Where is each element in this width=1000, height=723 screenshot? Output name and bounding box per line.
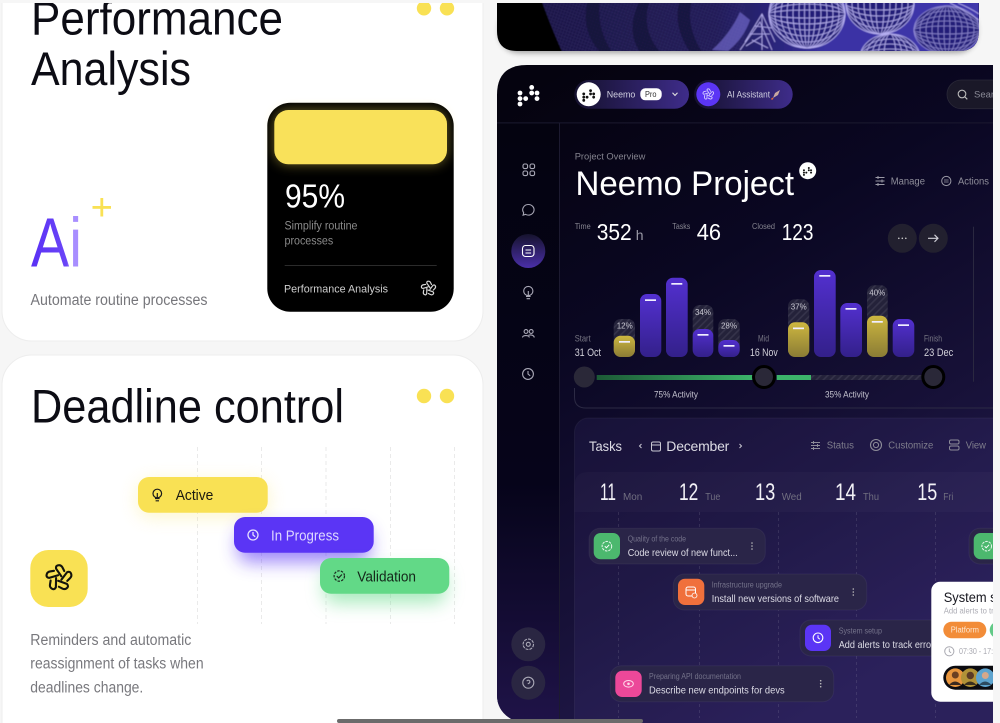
text: reminders bbox=[30, 632, 204, 697]
panel: dashboard bbox=[497, 65, 1000, 723]
date labels bbox=[575, 335, 953, 356]
tag: Active bbox=[138, 477, 268, 517]
stats row bbox=[574, 223, 813, 240]
bar chart bbox=[614, 270, 914, 357]
icon: chat bbox=[523, 204, 534, 215]
day header row: 12 bbox=[679, 479, 698, 506]
task: code review: Code review of new funct... bbox=[628, 547, 738, 559]
timeline slider: 75% Activity bbox=[654, 390, 698, 400]
purple bars bbox=[640, 270, 914, 357]
day header row: 13 bbox=[755, 479, 775, 506]
heading: Performance Analysis: Analysis bbox=[31, 42, 191, 95]
task: install: Install new versions of software bbox=[712, 593, 839, 605]
stats row: Tasks bbox=[672, 222, 690, 231]
stat card: 95%: Simplify routine bbox=[284, 220, 358, 232]
actions: manage: Manage bbox=[891, 176, 925, 187]
tag: Validation: Validation bbox=[357, 568, 416, 585]
tasks header: December bbox=[666, 438, 730, 454]
task: alerts: Add alerts to track errors bbox=[839, 639, 939, 651]
percent labels: 28% bbox=[721, 322, 737, 331]
panel: performance analysis card bbox=[2, 0, 483, 341]
day header row: Fri bbox=[943, 492, 953, 503]
timeline slider: 35% Activity bbox=[825, 390, 869, 400]
tasks header: Customize bbox=[888, 440, 934, 452]
panel: tasks bbox=[574, 418, 1000, 723]
percent labels: 34% bbox=[695, 308, 711, 317]
ticks bbox=[619, 275, 909, 347]
stats row: Time bbox=[575, 222, 591, 231]
tasks header: Status bbox=[827, 440, 854, 452]
chip: AI Assistant: AI Assistant bbox=[727, 89, 770, 100]
timeline slider bbox=[574, 366, 993, 408]
stat card: 95%: processes bbox=[284, 236, 333, 248]
actions: manage bbox=[876, 176, 989, 187]
sidebar icons bbox=[511, 164, 545, 700]
logo bbox=[518, 85, 539, 106]
icon: bulb bbox=[524, 286, 533, 299]
icon: yellow plus bbox=[92, 198, 111, 216]
icon: clock bbox=[523, 369, 533, 379]
date labels: 16 Nov bbox=[750, 347, 778, 359]
project overview heading bbox=[575, 151, 816, 203]
tag: Validation bbox=[320, 558, 449, 603]
project overview heading: Project Overview bbox=[575, 151, 646, 162]
date labels: Finish bbox=[924, 333, 942, 343]
yellow dots bbox=[417, 389, 454, 403]
yellow bars bbox=[614, 316, 888, 357]
heading: Deadline control: Deadline control bbox=[31, 380, 344, 433]
day header row: 14 bbox=[835, 479, 856, 506]
day header row: Tue bbox=[705, 492, 721, 503]
stats row: 352 bbox=[597, 219, 632, 245]
date labels: 23 Dec bbox=[924, 347, 954, 359]
task: install bbox=[673, 574, 867, 610]
icon: users bbox=[522, 330, 534, 338]
stats row: 123 bbox=[782, 219, 813, 245]
percent labels: 37% bbox=[791, 302, 807, 311]
button: help bbox=[511, 666, 545, 700]
tasks header: View bbox=[966, 440, 987, 452]
date labels: Start bbox=[575, 333, 591, 343]
task: alerts bbox=[800, 620, 970, 656]
chip: AI Assistant bbox=[694, 80, 793, 109]
tasks header bbox=[589, 439, 986, 452]
avatars bbox=[943, 666, 1000, 690]
stats row: h bbox=[636, 227, 643, 243]
day header row: 11 bbox=[600, 479, 616, 506]
day header row: Thu bbox=[863, 492, 879, 503]
percent labels bbox=[617, 288, 885, 331]
caption: automate: Automate routine processes bbox=[30, 292, 208, 309]
percent labels: 12% bbox=[617, 322, 633, 331]
task: alerts: System setup bbox=[839, 626, 882, 635]
text: reminders: Reminders and automatic bbox=[30, 632, 192, 649]
Ai logo: Ai bbox=[31, 203, 82, 282]
stat card: 95%: 95% bbox=[285, 177, 345, 214]
stat card: 95%: Performance Analysis bbox=[284, 284, 388, 296]
popup: System setup bbox=[931, 582, 1000, 702]
scrollbar bbox=[337, 719, 643, 723]
date labels: 31 Oct bbox=[575, 347, 601, 359]
popup: System setup: Platform bbox=[951, 625, 979, 634]
day header row: Mon bbox=[623, 492, 642, 503]
project overview heading: Neemo Project bbox=[576, 165, 795, 203]
button: settings bbox=[511, 627, 545, 661]
stats row: Closed bbox=[752, 222, 775, 231]
percent labels: 40% bbox=[869, 288, 885, 297]
icon: tasks active bbox=[511, 234, 545, 268]
task: clipped right bbox=[969, 528, 1000, 564]
day header row bbox=[601, 483, 953, 500]
round buttons bbox=[888, 224, 948, 253]
day header row: 15 bbox=[917, 479, 937, 506]
task: api docs bbox=[610, 666, 834, 702]
chip: Neemo: Neemo bbox=[607, 89, 635, 100]
tag: In Progress bbox=[234, 517, 374, 562]
bright lattice blobs bbox=[772, 3, 979, 51]
actions: manage: Actions bbox=[958, 176, 989, 187]
tasks header: Tasks bbox=[589, 438, 622, 454]
date labels: Mid bbox=[758, 333, 769, 343]
dim folds bbox=[586, 0, 702, 52]
day header row: Wed bbox=[782, 492, 802, 503]
text: reminders: deadlines change. bbox=[30, 680, 143, 697]
task: api docs: Preparing API documentation bbox=[649, 672, 741, 681]
icon: flower tile bbox=[30, 550, 88, 607]
decorative yellow dots top bbox=[416, 3, 454, 16]
task: code review: Quality of the code bbox=[628, 534, 686, 543]
icon: grid bbox=[523, 164, 535, 176]
stat card: 95% bbox=[267, 103, 454, 312]
text: reminders: reassignment of tasks when bbox=[30, 656, 204, 673]
tag: Active: Active bbox=[176, 487, 213, 504]
task: code review bbox=[589, 528, 765, 564]
image: wireframe mesh banner bbox=[496, 3, 980, 56]
tag: In Progress: In Progress bbox=[271, 527, 339, 544]
chip: Neemo bbox=[574, 80, 689, 109]
panel: deadline control card bbox=[2, 355, 483, 723]
search box bbox=[947, 80, 1000, 109]
heading: Performance Analysis bbox=[31, 0, 283, 95]
chip: Neemo: Pro bbox=[645, 90, 657, 99]
task: api docs: Describe new endpoints for devs bbox=[649, 685, 785, 697]
hatched backgrounds bbox=[614, 285, 888, 357]
task: install: Infrastructure upgrade bbox=[712, 580, 782, 589]
stats row: 46 bbox=[697, 219, 721, 245]
